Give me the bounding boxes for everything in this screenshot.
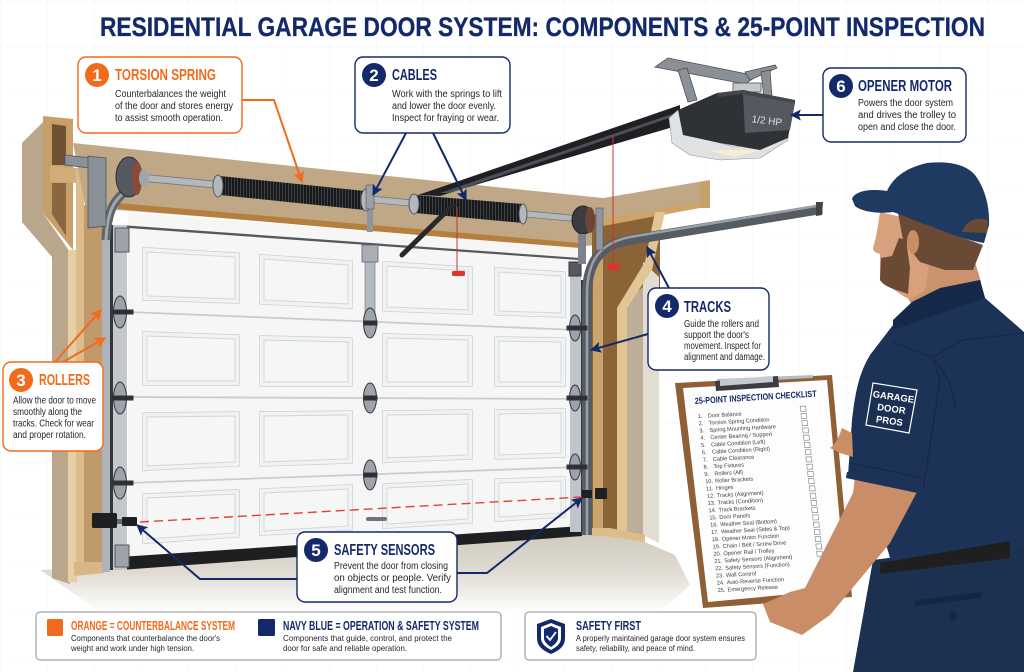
motor label: 1/2 HP xyxy=(751,114,783,129)
collar xyxy=(893,280,985,330)
arrow: opener motor xyxy=(791,114,823,116)
beard xyxy=(880,238,910,294)
navy legend text xyxy=(283,618,479,653)
checklist rows: Safety Sensors (Alignment) xyxy=(724,555,793,564)
sleeve patch: DOOR xyxy=(876,402,906,417)
shaft xyxy=(140,174,580,222)
badge 1: 1 xyxy=(92,66,102,85)
checklist rows: Door Panels xyxy=(719,513,751,521)
orange legend text: ORANGE = COUNTERBALANCE SYSTEM xyxy=(71,618,235,633)
heading: TORSION SPRING xyxy=(115,67,216,84)
spring left xyxy=(220,176,365,210)
shirt seams xyxy=(848,333,1024,491)
description: Work with the springs to lift xyxy=(392,89,502,100)
icon: shield xyxy=(537,619,565,654)
checklist rows: Tracks (Condition) xyxy=(717,498,764,506)
right safety sensor xyxy=(582,488,607,499)
right wood frame xyxy=(590,180,710,543)
description: Prevent the door from closing xyxy=(334,561,448,572)
belt xyxy=(880,541,1010,574)
opener motor xyxy=(655,58,795,160)
callout 5: safety sensors xyxy=(297,532,457,602)
heading: ROLLERS xyxy=(39,372,90,389)
badge 5 xyxy=(304,538,328,562)
technician arm and hand xyxy=(763,472,924,635)
checklist rows: 18. xyxy=(712,537,720,543)
description: tracks. Check for wear xyxy=(13,418,95,430)
clip xyxy=(717,375,813,383)
navy legend text: Components that guide, control, and protect the xyxy=(283,633,452,643)
checklist rows: 13. xyxy=(707,501,716,507)
checklist heading: 25-POINT INSPECTION CHECKLIST xyxy=(695,389,817,406)
description: to assist smooth operation. xyxy=(115,113,223,124)
heading: TRACKS xyxy=(684,299,731,316)
sleeve patch xyxy=(866,383,917,433)
arrows: safety sensors xyxy=(137,498,582,579)
technician xyxy=(848,162,1024,672)
checklist rows: Auto-Reverse Function xyxy=(727,577,784,586)
checklist rows: 6. xyxy=(702,450,707,456)
description: open and close the door. xyxy=(858,122,956,133)
checklist rows xyxy=(697,406,826,594)
bottom seal xyxy=(120,526,582,570)
heading: CABLES xyxy=(392,67,437,84)
safety text: A properly maintained garage door system ensures xyxy=(576,633,745,643)
checklist rows: Cable Clearance xyxy=(712,455,755,463)
left wood frame xyxy=(22,116,104,584)
cap back opening xyxy=(962,219,988,233)
far hand on clipboard xyxy=(830,428,853,457)
arrows: tracks xyxy=(591,247,669,350)
right track xyxy=(567,202,823,535)
door arm xyxy=(402,205,453,255)
door handle xyxy=(366,517,387,521)
description xyxy=(684,319,765,363)
checklist rows: Top Fixtures xyxy=(713,463,745,470)
checklist rows: Weather Seal (Bottom) xyxy=(720,519,777,528)
checklist rows: 7. xyxy=(703,457,708,463)
checklist rows: 25. xyxy=(717,588,726,594)
white housing xyxy=(669,110,788,160)
description: Counterbalances the weight xyxy=(115,89,226,100)
description: Guide the rollers and xyxy=(684,319,759,330)
description: Powers the door system xyxy=(858,98,953,109)
callout 4: tracks xyxy=(648,288,769,370)
torsion assembly xyxy=(65,155,603,264)
callout 6: opener motor xyxy=(823,68,966,142)
safety text: safety, reliability, and peace of mind. xyxy=(576,643,695,653)
description: and proper rotation. xyxy=(13,430,86,441)
checklist rows: Torsion Spring Condition xyxy=(708,417,770,427)
description: and lower the door evenly. xyxy=(392,101,496,112)
badge 6: 6 xyxy=(836,77,846,96)
description xyxy=(392,89,502,124)
description: of the door and stores energy xyxy=(115,101,233,112)
checklist rows: 10. xyxy=(705,479,714,485)
arrows: cables xyxy=(373,133,466,200)
checklist rows: 23. xyxy=(716,573,725,579)
callout 2: cables xyxy=(355,57,510,133)
checklist rows: Track Brackets xyxy=(718,506,756,514)
legend panel xyxy=(36,612,501,660)
checklist rows: 14. xyxy=(708,508,717,514)
checklist rows: Wall Control xyxy=(726,571,757,579)
description xyxy=(858,98,956,133)
checklist rows: Door Balance xyxy=(708,412,742,419)
checklist rows: 21. xyxy=(714,559,723,565)
description: Allow the door to move xyxy=(13,396,96,406)
badge 2: 2 xyxy=(369,66,379,85)
navy swatch xyxy=(258,619,275,636)
face xyxy=(873,212,935,300)
description: alignment and test function. xyxy=(334,585,442,596)
shirt xyxy=(848,280,1024,568)
left track xyxy=(102,190,133,572)
checklist rows: Safety Sensors (Function) xyxy=(725,562,790,572)
sleeve patch: PROS xyxy=(875,414,903,429)
light xyxy=(707,150,760,157)
checklist rows: Cable Condition (Left) xyxy=(711,439,766,448)
checklist rows: 8. xyxy=(703,464,709,471)
center strut and hinges xyxy=(362,205,378,490)
checklist rows: 15. xyxy=(709,515,718,521)
checklist rows: 9. xyxy=(704,472,710,478)
safety sensor beam xyxy=(140,497,582,522)
checklist rows: Spring Mounting Hardware xyxy=(709,424,776,434)
heading: SAFETY SENSORS xyxy=(334,542,435,559)
checklist rows: 16. xyxy=(710,522,719,529)
neck xyxy=(900,255,981,306)
cap xyxy=(852,162,989,243)
arrows: rollers xyxy=(55,310,105,362)
badge 2 xyxy=(362,63,386,87)
hair xyxy=(898,213,983,270)
checklist rows: 19. xyxy=(712,544,721,550)
callout 3: rollers xyxy=(3,362,103,451)
description xyxy=(13,396,96,441)
safety text: SAFETY FIRST xyxy=(576,618,641,633)
description: movement. Inspect for xyxy=(684,341,762,352)
badge 6 xyxy=(829,74,853,98)
checklist rows: Cable Condition (Right) xyxy=(712,447,770,456)
checklist rows: 2. xyxy=(698,421,704,427)
description xyxy=(115,89,233,124)
checklist rows: Rollers (All) xyxy=(714,470,744,477)
heading: OPENER MOTOR xyxy=(858,78,952,95)
left safety sensor xyxy=(92,513,137,528)
checklist rows: 20. xyxy=(713,551,722,558)
checklist rows: Opener Rail / Trolley xyxy=(723,548,775,557)
ear xyxy=(907,230,919,254)
back pocket xyxy=(915,592,982,620)
dark body xyxy=(678,90,795,150)
spring right xyxy=(415,195,523,223)
rail highlight xyxy=(440,113,675,193)
navy legend text: NAVY BLUE = OPERATION & SAFETY SYSTEM xyxy=(283,618,479,633)
pants xyxy=(853,540,1024,672)
garage door xyxy=(120,228,582,570)
checklist rows: Tracks (Alignment) xyxy=(717,491,764,499)
badge 4: 4 xyxy=(662,297,672,316)
checklist rows: 22. xyxy=(715,566,724,572)
description: smoothly along the xyxy=(13,407,82,418)
door panels xyxy=(147,252,561,539)
roller hinges xyxy=(112,228,133,567)
floor xyxy=(40,532,690,612)
center bearing xyxy=(366,185,374,209)
checklist rows: Weather Seal (Sides & Top) xyxy=(721,526,790,535)
checklist rows: Opener Motor Function xyxy=(722,534,780,543)
checklist rows: 1. xyxy=(698,414,703,420)
sleeve patch: GARAGE xyxy=(872,389,915,406)
checklist rows: Center Bearing / Support xyxy=(710,432,773,441)
left drum xyxy=(116,157,142,197)
checklist rows: Chain / Belt / Screw Drive xyxy=(722,540,787,550)
orange legend text: Components that counterbalance the door's xyxy=(71,633,220,643)
opener rail xyxy=(418,105,680,196)
badge 3: 3 xyxy=(16,371,26,390)
description: and drives the trolley to xyxy=(858,110,956,121)
right drum xyxy=(596,208,603,250)
orange legend text xyxy=(70,618,235,653)
checklist rows: 11. xyxy=(706,486,714,492)
checklist rows: 5. xyxy=(701,443,707,449)
description: alignment and damage. xyxy=(684,352,765,363)
navy legend text: door for safe and reliable operation. xyxy=(283,643,407,653)
description: on objects or people. Verify xyxy=(334,573,451,584)
mount bracket xyxy=(655,58,777,102)
arrow: torsion spring xyxy=(242,100,302,182)
checklist rows: 17. xyxy=(711,530,720,536)
clipboard xyxy=(675,375,852,608)
safety text xyxy=(576,618,745,653)
orange legend text: weight and work under high tension. xyxy=(70,643,194,653)
checklist rows: Hinges xyxy=(716,485,734,492)
checklist rows: 4. xyxy=(700,435,706,442)
checklist rows: 24. xyxy=(717,580,725,587)
checklist rows: Emergency Release xyxy=(727,585,778,593)
description: support the door's xyxy=(684,330,749,341)
checklist rows: 3. xyxy=(699,428,705,434)
callout 1: torsion spring xyxy=(78,57,242,133)
checklist rows: Roller Brackets xyxy=(715,477,754,485)
checklist rows: 12. xyxy=(707,493,716,500)
description: Inspect for fraying or wear. xyxy=(392,113,499,124)
safety first panel xyxy=(525,612,756,660)
orange swatch xyxy=(47,619,63,636)
left bracket xyxy=(65,155,106,228)
badge 5: 5 xyxy=(311,541,321,560)
description xyxy=(334,561,451,596)
emergency release ropes xyxy=(452,135,620,276)
badge 1 xyxy=(85,63,109,87)
header beam xyxy=(73,143,603,262)
